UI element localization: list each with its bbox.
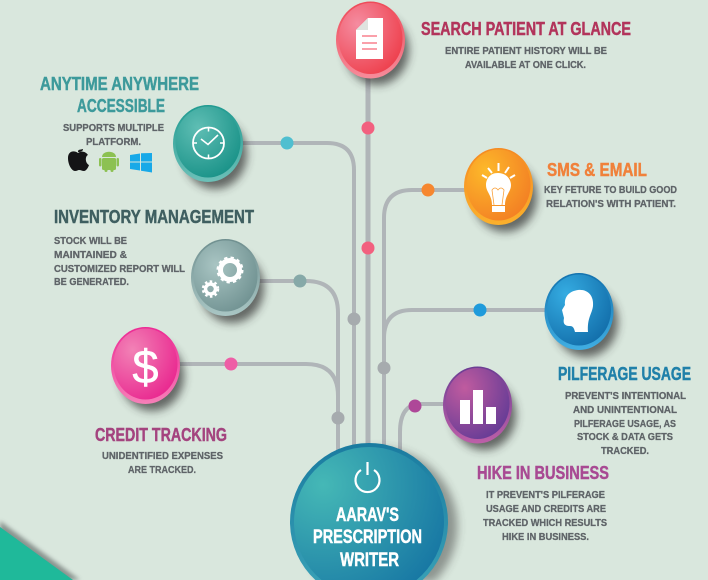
text block: ENTIRE PATIENT HISTORY WILL BE bbox=[445, 45, 607, 57]
corner triangle bbox=[0, 521, 80, 580]
text block: PILFERAGE USAGE, AS bbox=[574, 418, 676, 430]
icon: windows bbox=[130, 153, 152, 172]
text block bbox=[544, 184, 677, 210]
text block: PREVENT'S INTENTIONAL bbox=[565, 390, 687, 402]
panel: anytime anywhere bbox=[40, 74, 247, 189]
text block: SUPPORTS MULTIPLE bbox=[63, 122, 164, 134]
heading bbox=[40, 74, 199, 116]
icon: head bbox=[562, 290, 593, 332]
connector lines bbox=[178, 70, 547, 460]
text block: STOCK WILL BE bbox=[54, 235, 127, 247]
text block bbox=[565, 390, 687, 457]
text block: AVAILABLE AT ONE CLICK. bbox=[465, 59, 586, 71]
text block bbox=[445, 45, 607, 71]
heading: ANYTIME ANYWHERE bbox=[40, 74, 199, 94]
title bbox=[313, 505, 422, 571]
text block: MAINTAINED & bbox=[54, 249, 127, 261]
icon: gears bbox=[203, 258, 242, 296]
heading: SEARCH PATIENT AT GLANCE bbox=[421, 19, 631, 39]
heading: SMS & EMAIL bbox=[547, 160, 647, 180]
text block: TRACKED. bbox=[601, 445, 649, 457]
text block: TRACKED WHICH RESULTS bbox=[483, 517, 607, 529]
text block: UNIDENTIFIED EXPENSES bbox=[102, 450, 223, 462]
text block: HIKE IN BUSINESS. bbox=[502, 531, 589, 543]
panel: inventory management bbox=[54, 207, 264, 323]
heading: HIKE IN BUSINESS bbox=[477, 463, 609, 483]
icon: android bbox=[99, 152, 119, 172]
title: PRESCRIPTION bbox=[313, 527, 422, 548]
title: AARAV'S bbox=[336, 505, 399, 526]
panel: sms and email bbox=[464, 148, 677, 232]
heading: CREDIT TRACKING bbox=[95, 425, 227, 445]
panel: central hub bbox=[290, 443, 458, 580]
icon: apple bbox=[68, 149, 89, 171]
icon: clock bbox=[193, 128, 224, 158]
heading: INVENTORY MANAGEMENT bbox=[54, 207, 254, 227]
icon: power bbox=[356, 462, 380, 492]
text block: USAGE AND CREDITS ARE bbox=[486, 503, 606, 515]
title: WRITER bbox=[340, 550, 399, 571]
text block bbox=[63, 122, 164, 148]
panel: pilferage usage bbox=[544, 273, 691, 457]
icon: light bulb bbox=[482, 163, 515, 212]
panel: credit tracking bbox=[95, 327, 227, 476]
panel: search patient bbox=[336, 2, 631, 85]
text block bbox=[483, 489, 607, 543]
text block: AND UNINTENTIONAL bbox=[573, 404, 678, 416]
text block: RELATION'S WITH PATIENT. bbox=[546, 198, 676, 210]
text block: PLATFORM. bbox=[86, 136, 141, 148]
panel: hike in business bbox=[443, 366, 609, 543]
text block bbox=[54, 235, 186, 288]
icon: bar chart bbox=[460, 390, 496, 424]
icon: document bbox=[356, 18, 383, 59]
text block: KEY FETURE TO BUILD GOOD bbox=[544, 184, 677, 196]
icon: dollar: $ bbox=[132, 340, 159, 393]
text block: BE GENERATED. bbox=[54, 276, 129, 288]
connector dots bbox=[224, 122, 486, 424]
text block: ARE TRACKED. bbox=[128, 464, 196, 476]
text block: IT PREVENT'S PILFERAGE bbox=[486, 489, 605, 501]
text block: CUSTOMIZED REPORT WILL bbox=[54, 263, 186, 275]
text block bbox=[102, 450, 223, 476]
heading: ACCESSIBLE bbox=[77, 96, 165, 116]
text block: STOCK & DATA GETS bbox=[577, 431, 673, 443]
